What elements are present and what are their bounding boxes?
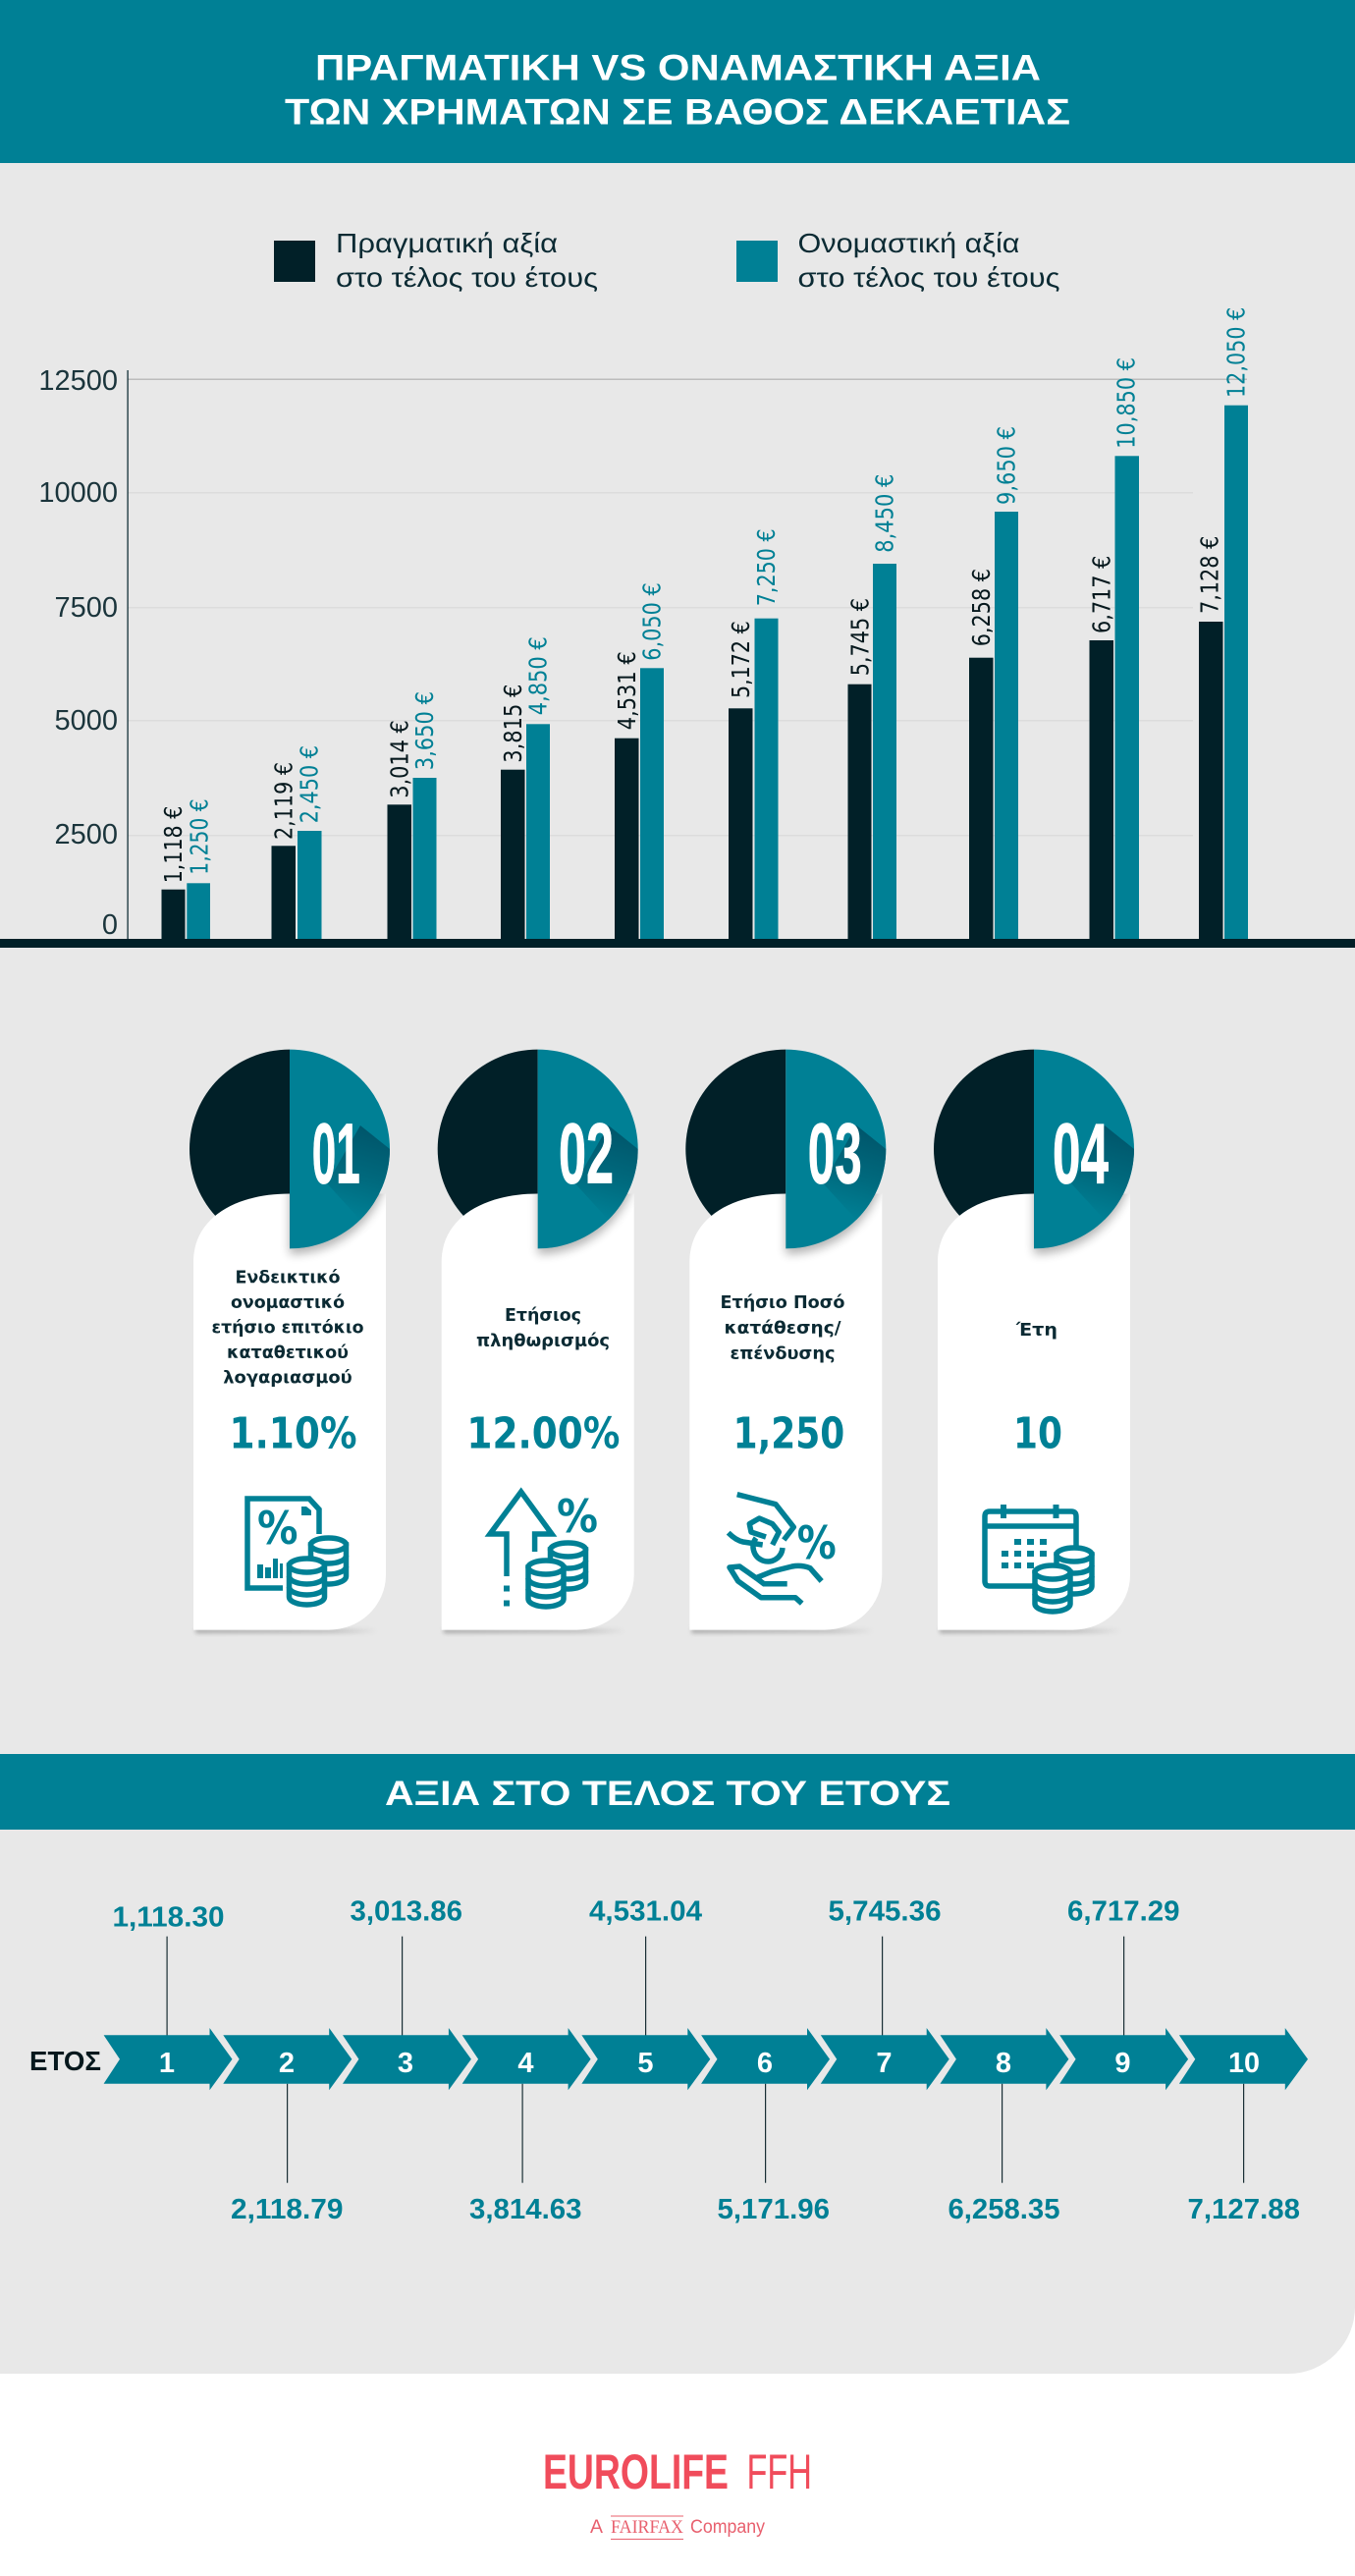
panel: card 02 <box>438 1050 638 1633</box>
card 03 label: κατάθεσης/ <box>725 1318 841 1339</box>
y axis labels: 0 <box>102 909 118 941</box>
timeline <box>29 1896 1308 2225</box>
number 02: 02 <box>559 1106 614 1202</box>
nominal value labels: 2,450 € <box>295 745 324 823</box>
real value labels: 1,118 € <box>159 806 188 883</box>
title: ΠΡΑΓΜΑΤΙΚΗ VS ΟΝΑΜΑΣΤΙΚΗ ΑΞΙΑ <box>315 48 1041 88</box>
arrow: year 5 <box>581 2028 710 2090</box>
arrow: year 5: 5 <box>637 2048 654 2079</box>
card 01 label <box>212 1267 363 1389</box>
icon: document with percent and coins: % <box>257 1502 298 1555</box>
arrow: year 8: 8 <box>996 2048 1011 2079</box>
nominal value labels: 4,850 € <box>524 636 552 715</box>
arrow: year 10: 10 <box>1228 2048 1260 2079</box>
y axis labels <box>38 365 118 941</box>
legend <box>274 228 1060 293</box>
icon: hands with coins and percent: % <box>797 1516 837 1569</box>
number 03: 03 <box>808 1106 862 1202</box>
card 01 label: Ενδεικτικό <box>236 1267 340 1288</box>
nominal value bars <box>187 406 1248 940</box>
icon: rising arrow with percent and coins: % <box>557 1490 598 1543</box>
real value labels: 3,014 € <box>385 720 414 798</box>
number 04: 04 <box>1053 1106 1109 1202</box>
upper values: 1,118.30 <box>112 1902 224 1934</box>
card 03 label <box>721 1292 844 1364</box>
arrow: year 7 <box>821 2028 949 2090</box>
logo wordmark: FFH <box>746 2444 812 2499</box>
icon: document with percent and coins <box>247 1499 346 1605</box>
nominal value labels: 1,250 € <box>186 798 214 875</box>
legend: real value: Πραγματική αξία <box>336 228 558 258</box>
timeline label: ΕΤΟΣ <box>29 2046 101 2076</box>
y axis labels: 12500 <box>38 365 118 397</box>
upper values: 3,013.86 <box>350 1896 462 1928</box>
arrow: year 3: 3 <box>398 2048 413 2079</box>
lower values: 5,171.96 <box>717 2194 830 2225</box>
real value labels: 6,258 € <box>967 569 996 646</box>
real value labels <box>159 536 1223 883</box>
bar chart <box>0 307 1355 948</box>
y axis labels: 10000 <box>38 477 118 509</box>
card 03 label: επένδυσης <box>731 1343 835 1364</box>
lower values: 6,258.35 <box>948 2194 1060 2225</box>
card 03 value: 1,250 <box>733 1409 844 1459</box>
card 01 label: ονομαστικό <box>231 1292 345 1313</box>
baseline <box>0 939 1355 948</box>
lower values: 3,814.63 <box>469 2194 581 2225</box>
logo wordmark: EUROLIFE <box>543 2444 729 2499</box>
legend: nominal value: στο τέλος του έτους <box>797 262 1060 293</box>
nominal value labels: 7,250 € <box>752 528 781 606</box>
real value labels: 2,119 € <box>269 762 298 840</box>
icon: calendar with coins <box>985 1505 1092 1612</box>
logo tagline: A <box>590 2517 603 2538</box>
real value labels: 6,717 € <box>1088 556 1115 633</box>
nominal value labels: 3,650 € <box>410 691 439 770</box>
nominal value labels: 6,050 € <box>638 582 666 661</box>
arrow: year 9 <box>1059 2028 1188 2090</box>
card 01 label: καταθετικού <box>227 1343 349 1363</box>
card 03 label: Ετήσιο Ποσό <box>721 1292 844 1313</box>
real value labels: 5,745 € <box>846 598 874 676</box>
panel: card 04 <box>934 1050 1134 1633</box>
upper values: 6,717.29 <box>1067 1896 1180 1928</box>
upper values: 5,745.36 <box>829 1896 941 1928</box>
card 02 label <box>476 1305 610 1351</box>
legend: nominal value <box>736 228 1060 293</box>
arrow: year 3 <box>343 2028 471 2090</box>
arrow: year 2: 2 <box>279 2048 295 2079</box>
logo tagline: Company <box>690 2517 765 2538</box>
section heading: ΑΞΙΑ ΣΤΟ ΤΕΛΟΣ ΤΟΥ ΕΤΟΥΣ <box>385 1775 950 1813</box>
logo tagline <box>590 2516 765 2540</box>
real value bars <box>161 622 1223 941</box>
real value labels: 4,531 € <box>613 651 641 730</box>
card 04 label: Έτη <box>1015 1320 1057 1341</box>
real value labels: 7,128 € <box>1196 536 1223 614</box>
icon: hands with coins and percent <box>729 1495 837 1604</box>
panel: card 03 <box>685 1050 886 1633</box>
arrow: year 9: 9 <box>1114 2048 1131 2079</box>
nominal value labels: 10,850 € <box>1111 357 1141 449</box>
nominal value labels: 12,050 € <box>1221 307 1251 398</box>
section banner <box>0 1754 1355 1830</box>
panel: card 01 <box>190 1050 390 1633</box>
title: ΤΩΝ ΧΡΗΜΑΤΩΝ ΣΕ ΒΑΘΟΣ ΔΕΚΑΕΤΙΑΣ <box>285 92 1070 133</box>
arrow: year 1: 1 <box>159 2048 175 2079</box>
nominal value labels: 8,450 € <box>870 474 899 553</box>
title <box>285 48 1070 133</box>
y axis labels: 5000 <box>54 705 118 737</box>
upper values: 4,531.04 <box>589 1896 702 1928</box>
icon: rising arrow with percent and coins <box>490 1490 598 1607</box>
card 02 label: Ετήσιος <box>505 1305 581 1326</box>
card 02 label: πληθωρισμός <box>476 1331 610 1351</box>
logo <box>543 2444 812 2540</box>
card 01 label: ετήσιο επιτόκιο <box>212 1318 363 1338</box>
arrow: year 7: 7 <box>876 2048 893 2079</box>
arrow: year 4 <box>462 2028 591 2090</box>
y axis labels: 7500 <box>54 592 118 624</box>
card 02 value: 12.00% <box>466 1409 620 1459</box>
card 04 value: 10 <box>1013 1409 1062 1459</box>
arrow: year 4: 4 <box>517 2048 534 2079</box>
legend: nominal value: Ονομαστική αξία <box>797 228 1019 258</box>
arrow: year 8 <box>941 2028 1068 2090</box>
card 01 value: 1.10% <box>230 1409 357 1459</box>
title banner <box>0 0 1355 163</box>
legend: real value: στο τέλος του έτους <box>336 262 598 293</box>
upper values <box>112 1896 1180 1934</box>
nominal value labels <box>186 307 1251 875</box>
arrow: year 6: 6 <box>757 2048 773 2079</box>
connector lines <box>167 1937 1244 2183</box>
arrow: year 1 <box>104 2028 232 2090</box>
card 01 label: λογαριασμού <box>223 1367 352 1389</box>
lower values: 2,118.79 <box>231 2194 344 2225</box>
real value labels: 5,172 € <box>727 621 755 698</box>
arrow: year 2 <box>223 2028 352 2090</box>
legend: real value <box>274 228 598 293</box>
arrow: year 6 <box>701 2028 830 2090</box>
logo tagline: FAIRFAX <box>611 2517 683 2538</box>
real value labels: 3,815 € <box>499 685 527 763</box>
nominal value labels: 9,650 € <box>992 426 1021 505</box>
number 01: 01 <box>312 1106 360 1202</box>
y axis labels: 2500 <box>54 819 118 850</box>
lower values <box>231 2194 1300 2225</box>
lower values: 7,127.88 <box>1188 2194 1300 2225</box>
arrow: year 10 <box>1179 2028 1308 2090</box>
